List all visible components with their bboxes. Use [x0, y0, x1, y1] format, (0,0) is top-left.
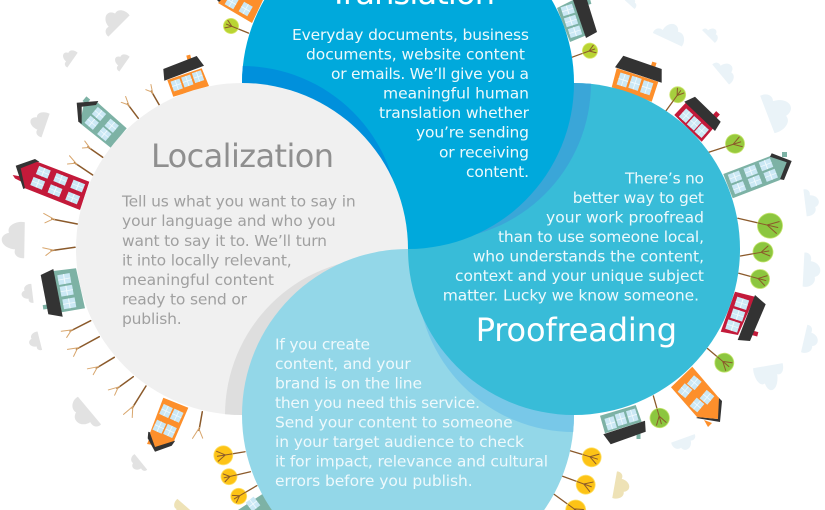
cream clouds [169, 471, 632, 510]
text: review body: it for impact, relevance and cultural [275, 453, 548, 471]
text: localization body: meaningful content [122, 271, 274, 289]
house: teal long right [723, 152, 792, 198]
text: review body: then you need this service. [275, 394, 480, 412]
text: review body: brand is on the line [275, 374, 422, 392]
house: red right [721, 292, 766, 341]
heading: Localization: Localization [151, 137, 334, 175]
panel: proofreading circle [408, 83, 740, 415]
panel: localization circle [76, 83, 408, 415]
crowned trees [212, 16, 785, 510]
house: teal bottom cropped [238, 493, 280, 510]
text: localization body: ready to send or [122, 290, 248, 308]
house: red with dark roof [674, 97, 721, 142]
house: orange bottom-left [147, 398, 188, 452]
house: teal tall [77, 96, 127, 148]
text: localization body: want to say it to. We’ll turn [122, 232, 327, 250]
text: review body: content, and your [275, 355, 411, 373]
text: localization body: it into locally relevant, [122, 251, 292, 269]
house: teal top-right [557, 0, 597, 42]
text: proofreading body: better way to get [573, 189, 704, 207]
house: orange right [671, 367, 722, 427]
text: review body: If you create [275, 335, 370, 353]
proofreading crescent shadow [478, 83, 591, 234]
background clouds [1, 3, 147, 476]
pale blue clouds [625, 0, 821, 454]
localization overlap quadrant [242, 83, 408, 249]
text: proofreading body: who understands the content, [473, 248, 704, 266]
text: review body: in your target audience to check [275, 433, 524, 451]
text: proofreading body [443, 169, 704, 305]
text: localization body: your language and who you [122, 212, 336, 230]
text: proofreading body: context and your unique subject [455, 267, 704, 285]
panel: review circle [242, 249, 574, 510]
text: translation body: Everyday documents, business [292, 26, 529, 44]
text: translation body: documents, website content [306, 46, 525, 64]
text: localization body: publish. [122, 310, 182, 328]
text: proofreading body: your work proofread [546, 208, 704, 226]
house: orange top-right [612, 56, 662, 102]
bare trees on the left [42, 84, 207, 440]
panel: translation circle [242, 0, 574, 249]
text: proofreading body: matter. Lucky we know someone. [443, 287, 699, 305]
localization crescent shadow [225, 264, 338, 415]
text: proofreading body: than to use someone local, [498, 228, 704, 246]
house: teal bottom-right [600, 405, 646, 444]
text: proofreading body: There’s no [624, 169, 704, 187]
text: translation body: or receiving [439, 143, 529, 161]
text: localization body [121, 193, 356, 328]
text: translation body: meaningful human [383, 85, 529, 103]
text: translation body: translation whether [379, 104, 530, 122]
house: teal with dark side roof, left [41, 268, 85, 317]
text: review body: Send your content to someone [275, 414, 513, 432]
house: orange with dark roof [163, 55, 209, 97]
review crescent shadow [423, 318, 574, 432]
house: red long [13, 159, 89, 210]
text: translation body: or emails. We’ll give you a [331, 65, 529, 83]
heading: Proofreading: Proofreading [476, 311, 677, 349]
text: translation body: content. [466, 163, 529, 181]
text: review body [275, 335, 548, 490]
text: translation body: you’re sending [416, 124, 529, 142]
house: orange top-left cropped [217, 0, 263, 23]
text: localization body: Tell us what you want to say in [121, 193, 356, 211]
text: translation body [292, 26, 530, 181]
text: review body: errors before you publish. [275, 472, 473, 490]
translation crescent shadow [242, 66, 393, 180]
